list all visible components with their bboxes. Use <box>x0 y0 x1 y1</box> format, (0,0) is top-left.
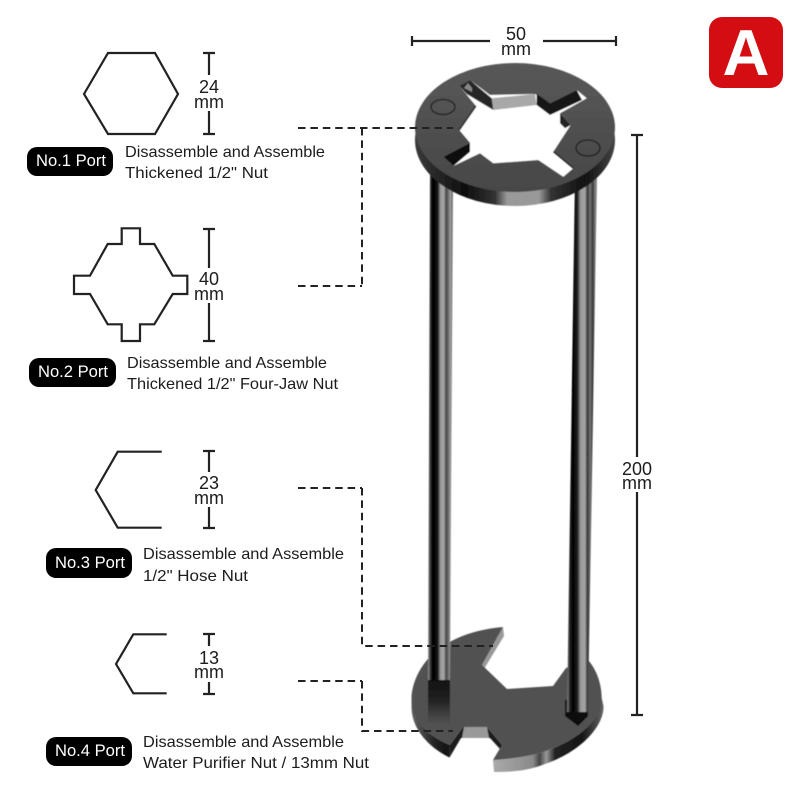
dimension: 40 mm <box>194 229 224 341</box>
label: No.3 Port <box>46 548 132 578</box>
text: port 3 description <box>143 546 344 585</box>
text: port 4 description: Water Purifier Nut / 13mm Nut <box>143 755 370 772</box>
bottom disc <box>411 627 604 772</box>
face <box>411 627 602 760</box>
dimension: 24 mm: 24 <box>199 77 219 97</box>
left rod reflection <box>428 672 450 724</box>
wrench illustration <box>411 63 615 772</box>
dimension: 23 mm: 23 <box>199 473 219 493</box>
dimension: 13 mm <box>194 634 224 694</box>
right rod base <box>565 700 588 726</box>
label: No.2 Port <box>29 358 116 387</box>
dashed leader: ports 1 and 2 <box>298 128 453 286</box>
text: port 3 description: 1/2" Hose Nut <box>143 568 249 585</box>
label: No.2 Port: No.2 Port <box>38 363 108 381</box>
dimension: 24 mm <box>194 53 224 134</box>
dimension: 13 mm: 13 <box>199 648 219 668</box>
label: No.4 Port <box>46 737 132 766</box>
left rim <box>412 698 450 758</box>
text: port 1 description <box>125 144 325 182</box>
text: port 4 description: Disassemble and Assemble <box>143 734 344 751</box>
text: port 1 description: Thickened 1/2" Nut <box>125 165 269 182</box>
dashed leader: port 3 <box>298 488 493 646</box>
text: port 3 description: Disassemble and Assemble <box>143 546 344 563</box>
dimension: 13 mm: mm <box>194 662 224 682</box>
circle marks <box>431 100 600 156</box>
label: No.3 Port: No.3 Port <box>55 554 125 572</box>
dimension: 24 mm: mm <box>194 92 224 112</box>
icon: four-jaw port 2 outline <box>74 228 187 341</box>
dimension: 23 mm: mm <box>194 488 224 508</box>
right rod <box>567 175 597 712</box>
icon: hexagon port 1 outline <box>84 53 178 134</box>
text: port 2 description <box>127 355 339 393</box>
dimension: 50 mm: mm <box>501 39 531 59</box>
text: port 2 description: Disassemble and Assemble <box>127 355 327 372</box>
left rod <box>428 175 453 680</box>
dimension: 40 mm: 40 <box>199 269 219 289</box>
text: port 2 description: Thickened 1/2" Four-Jaw Nut <box>127 376 339 393</box>
badge: A: A <box>723 16 769 89</box>
icon: hose port 3 outline <box>96 452 162 528</box>
icon: purifier port 4 outline <box>116 634 167 693</box>
top disc <box>415 63 615 206</box>
text: port 1 description: Disassemble and Assemble <box>125 144 325 161</box>
label: No.1 Port <box>27 147 113 176</box>
dimension: 200 mm: 200 <box>622 459 652 479</box>
dimension: 50 mm <box>412 24 616 59</box>
text: port 4 description <box>143 734 370 772</box>
dimension: 200 mm: mm <box>622 473 652 493</box>
dimension: 50 mm: 50 <box>506 24 526 44</box>
dimension: 40 mm: mm <box>194 284 224 304</box>
right rim <box>493 698 604 772</box>
label: No.4 Port: No.4 Port <box>55 742 125 760</box>
dashed leader: port 4 <box>298 681 453 731</box>
tip edge <box>482 627 504 669</box>
dimension: 23 mm <box>194 451 224 528</box>
dimension: 200 mm <box>622 135 652 715</box>
badge: A <box>709 16 783 89</box>
label: No.1 Port: No.1 Port <box>36 152 106 170</box>
notch wall <box>450 727 502 758</box>
four-jaw opening <box>443 80 587 177</box>
